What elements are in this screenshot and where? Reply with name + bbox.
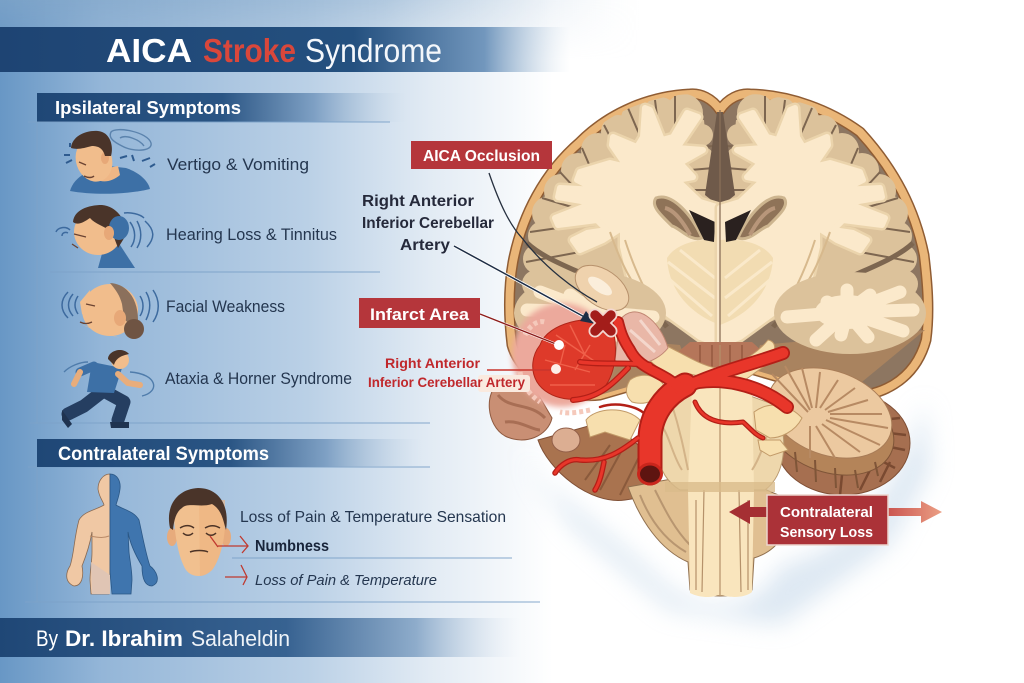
heading: contralateral symptoms — [37, 439, 422, 467]
gray matter — [535, 115, 720, 345]
icon: ataxia runner — [62, 350, 154, 428]
basal ganglia — [667, 240, 720, 325]
footer author banner — [0, 618, 520, 657]
title text: Stroke — [203, 32, 296, 69]
brainstem — [628, 345, 790, 597]
icon: hearing loss profile — [56, 205, 153, 268]
white matter halo — [555, 108, 720, 345]
leader: AICA occlusion — [489, 173, 597, 302]
text: hearing loss and tinnitus: Hearing Loss & Tinnitus — [166, 225, 337, 244]
dark fissure — [705, 112, 720, 207]
label: right anterior inferior cerebellar artery: Inferior Cerebellar — [362, 215, 494, 232]
temporal flower — [514, 272, 666, 354]
icon: half body sensory map — [67, 474, 157, 594]
soft shadow — [510, 400, 930, 625]
title banner — [0, 27, 570, 72]
text: loss of pain and temperature sensation: Loss of Pain & Temperature Sensation — [240, 509, 506, 526]
heading: ipsilateral symptoms — [37, 93, 407, 122]
arrow: left sensory — [729, 500, 770, 524]
footer author banner: Dr. Ibrahim — [65, 626, 183, 651]
ventricle — [654, 197, 702, 239]
occlusion x marker — [595, 315, 611, 331]
text: ataxia and horner syndrome: Ataxia & Horner Syndrome — [165, 369, 352, 388]
leader: infarct area — [480, 314, 564, 350]
label: right anterior inferior cerebellar artery: Right Anterior — [362, 193, 474, 210]
cerebrum — [510, 94, 928, 400]
label: right anterior inferior cerebellar artery: Artery — [400, 237, 450, 254]
text: facial weakness: Facial Weakness — [166, 297, 285, 316]
title text: Syndrome — [305, 32, 442, 69]
artery: anterior inferior cerebellar — [555, 322, 787, 490]
callout: contralateral sensory loss: Contralateral — [780, 504, 873, 521]
footer author banner: Salaheldin — [191, 626, 290, 651]
infarct area — [512, 256, 668, 413]
cerebellum — [753, 352, 910, 495]
label: infarct area — [359, 298, 480, 328]
leader arrow: right anterior inferior cerebellar artery — [454, 246, 596, 324]
label: AICA occlusion: AICA Occlusion — [423, 148, 540, 165]
arrow: right sensory — [886, 501, 942, 523]
label: red artery: Inferior Cerebellar Artery — [368, 374, 525, 390]
label: red artery: Right Anterior — [385, 355, 481, 371]
label: red artery — [368, 355, 530, 392]
footer author banner: By — [36, 626, 59, 651]
leader: artery label — [487, 364, 561, 374]
text: vertigo and vomiting: Vertigo & Vomiting — [167, 155, 309, 174]
sulci — [526, 96, 714, 262]
left lobes — [489, 380, 656, 500]
label: infarct area: Infarct Area — [370, 305, 470, 324]
temporal sulcus — [527, 243, 667, 327]
heading: contralateral symptoms: Contralateral Symptoms — [58, 444, 269, 465]
icon: face with numbness — [167, 488, 248, 585]
title text: AICA — [106, 32, 192, 69]
icon: vertigo man — [64, 130, 155, 194]
heading: ipsilateral symptoms: Ipsilateral Symptoms — [55, 97, 241, 118]
brain illustration — [489, 94, 930, 625]
text: loss of pain and temperature: Loss of Pain & Temperature — [255, 572, 437, 589]
icon: facial weakness profile — [62, 283, 158, 339]
callout: contralateral sensory loss: Sensory Loss — [780, 524, 873, 541]
text: numbness: Numbness — [255, 538, 329, 555]
callout: contralateral sensory loss — [767, 495, 888, 545]
cream lobes — [586, 340, 802, 456]
label: AICA occlusion — [411, 141, 552, 169]
